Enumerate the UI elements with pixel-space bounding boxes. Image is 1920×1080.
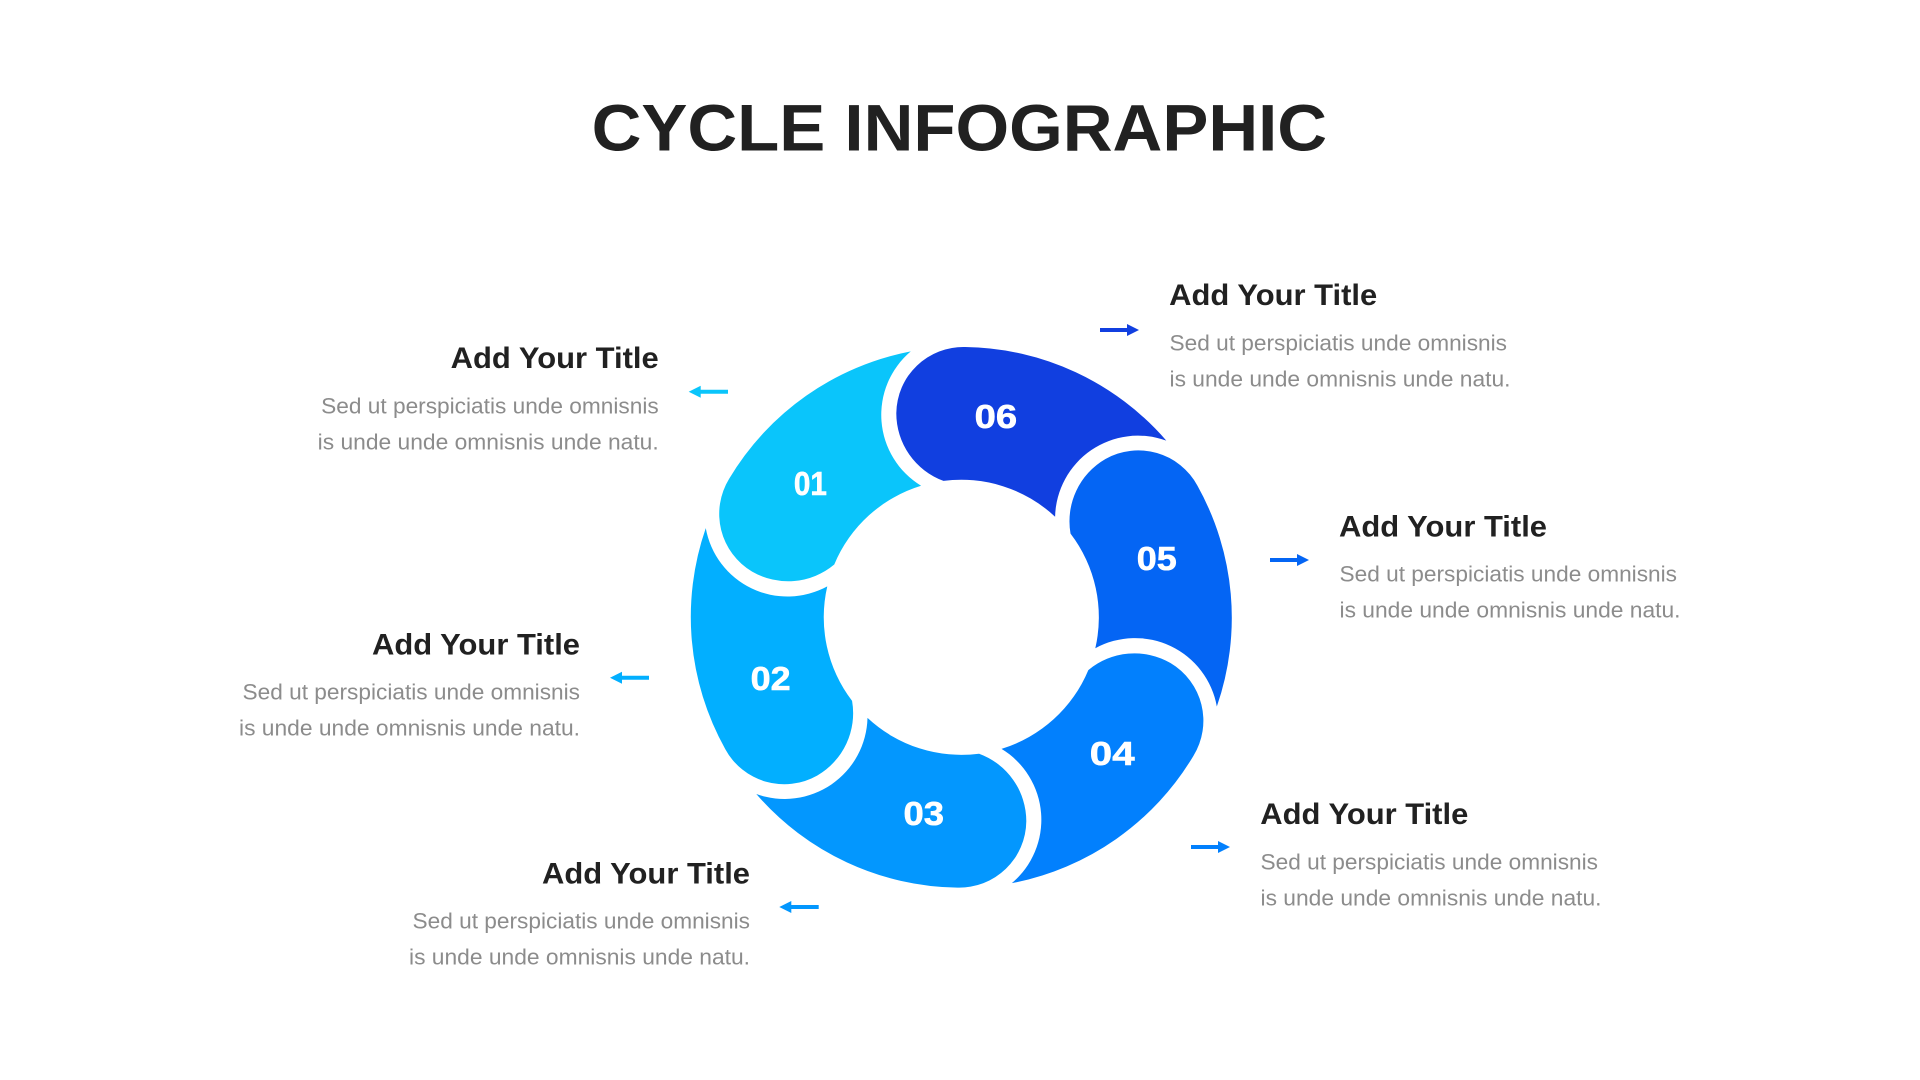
segment 04	[946, 611, 1228, 930]
text block 05	[1339, 510, 1680, 623]
segment 03	[756, 718, 1026, 888]
segment 05	[1016, 426, 1298, 745]
text block 06: Add Your Title	[1169, 279, 1377, 312]
text block 02	[239, 628, 580, 740]
text block 02: Add Your Title	[372, 628, 580, 661]
text block 03	[409, 857, 750, 969]
segment 06: 06	[975, 398, 1017, 435]
arrow 04	[1191, 841, 1230, 853]
title: CYCLE INFOGRAPHIC	[592, 90, 1327, 164]
text block 04: Add Your Title	[1260, 798, 1468, 831]
text block 03: Sed ut perspiciatis unde omnisnis	[412, 908, 750, 933]
text block 04: is unde unde omnisnis unde natu.	[1260, 885, 1602, 910]
cycle ring	[625, 305, 1298, 930]
segment 06	[896, 347, 1166, 517]
arrow 02	[610, 672, 649, 684]
arrow 06	[1100, 324, 1139, 336]
text block 05: is unde unde omnisnis unde natu.	[1340, 598, 1680, 623]
text block 05: Add Your Title	[1339, 510, 1547, 543]
arrow 01	[689, 386, 728, 398]
segment 05: 05	[1137, 540, 1177, 577]
text block 05: Sed ut perspiciatis unde omnisnis	[1340, 562, 1677, 587]
segment 01	[695, 305, 977, 623]
text block 03: is unde unde omnisnis unde natu.	[409, 944, 750, 969]
segment 04: 04	[1090, 735, 1135, 772]
text block 02: Sed ut perspiciatis unde omnisnis	[242, 679, 580, 704]
text block 01: is unde unde omnisnis unde natu.	[318, 429, 659, 454]
segment 02: 02	[751, 660, 791, 697]
text block 03: Add Your Title	[542, 857, 750, 890]
text block 06: is unde unde omnisnis unde natu.	[1170, 367, 1510, 392]
arrow 05	[1270, 554, 1309, 566]
text block 01: Sed ut perspiciatis unde omnisnis	[321, 393, 659, 418]
segment 01: 01	[794, 465, 827, 502]
segment 03: 03	[904, 795, 944, 832]
text block 04	[1260, 798, 1602, 910]
text block 04: Sed ut perspiciatis unde omnisnis	[1260, 849, 1598, 874]
arrow 03	[779, 901, 819, 913]
text block 01	[318, 342, 659, 454]
segment 02	[625, 490, 907, 809]
text block 02: is unde unde omnisnis unde natu.	[239, 715, 580, 740]
text block 06: Sed ut perspiciatis unde omnisnis	[1170, 331, 1507, 356]
text block 01: Add Your Title	[451, 342, 659, 375]
text block 06	[1169, 279, 1510, 392]
